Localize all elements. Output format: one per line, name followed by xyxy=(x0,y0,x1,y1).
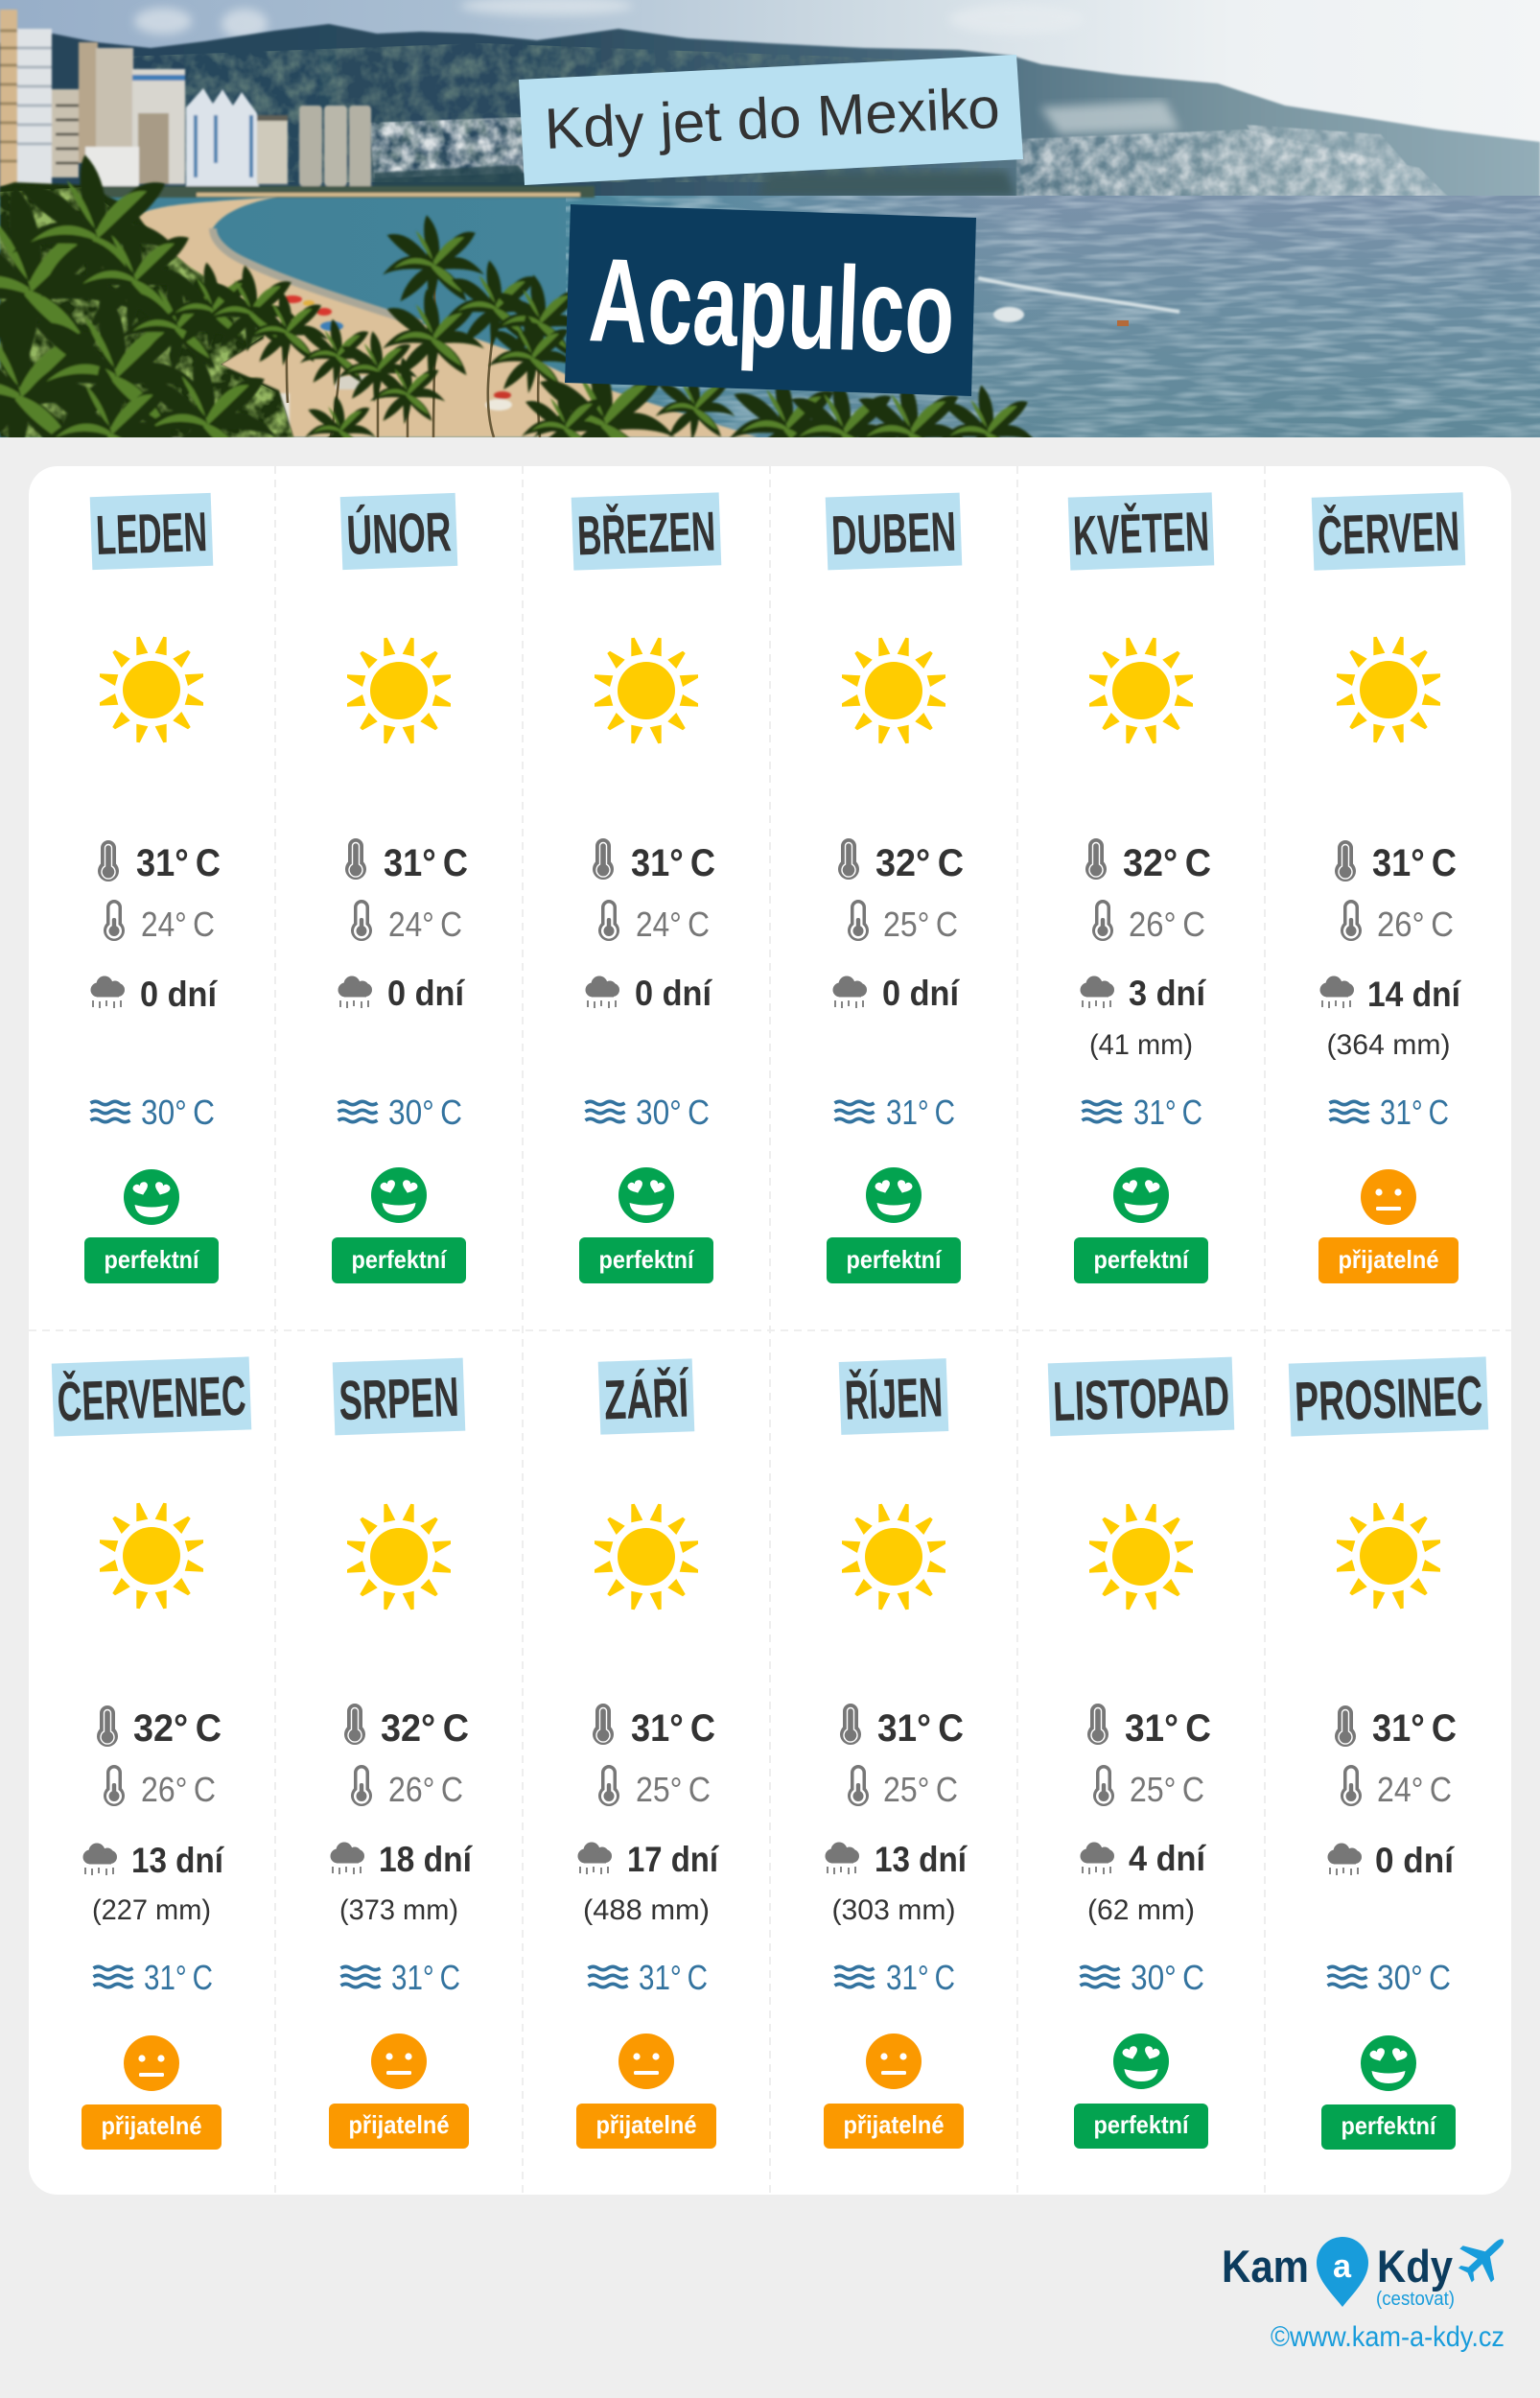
panel: months table xyxy=(29,466,1511,2195)
icon: sun xyxy=(595,1504,698,1610)
rating: perfektní: perfektní xyxy=(1093,1245,1189,1274)
palms xyxy=(0,182,293,437)
rain days: 13 dní xyxy=(131,1841,225,1880)
rain days xyxy=(585,974,713,1013)
rating: přijatelné xyxy=(576,2034,716,2149)
icon: sun xyxy=(347,638,451,743)
month label xyxy=(839,1358,948,1435)
max temperature: 32° C xyxy=(1123,842,1211,884)
month: září xyxy=(576,1358,720,2149)
rating: perfektní: perfektní xyxy=(846,1245,942,1274)
rain days: (373 mm) xyxy=(339,1894,458,1926)
min temperature: 26° C xyxy=(388,1770,463,1809)
rating: perfektní xyxy=(1074,1167,1208,1283)
max temperature xyxy=(1335,840,1457,884)
month label: BŘEZEN xyxy=(576,501,716,567)
sea temperature xyxy=(94,1958,213,1997)
rain days xyxy=(1327,1841,1456,1880)
rating: přijatelné xyxy=(824,2034,964,2149)
rain days: 4 dní xyxy=(1129,1839,1207,1878)
sea temperature: 31° C xyxy=(144,1958,213,1997)
month: květen xyxy=(1068,492,1214,1283)
rain days xyxy=(832,974,961,1013)
max temperature xyxy=(344,1704,469,1750)
rating: přijatelné: přijatelné xyxy=(349,2110,449,2139)
rain days: (227 mm) xyxy=(92,1894,211,1926)
icon: sun xyxy=(100,637,203,742)
rating: přijatelné: přijatelné xyxy=(1339,1245,1438,1274)
min temperature xyxy=(1341,1765,1452,1809)
rain days: (41 mm) xyxy=(1089,1029,1193,1061)
sea temperature: 30° C xyxy=(388,1093,462,1132)
month label xyxy=(52,1356,251,1437)
icon: sun xyxy=(1337,1503,1440,1609)
logo: Kam a Kdy: Kam xyxy=(1222,2241,1309,2292)
sea temperature: 30° C xyxy=(636,1093,710,1132)
month label: LISTOPAD xyxy=(1052,1365,1230,1433)
month: červen xyxy=(1312,492,1465,1283)
icon: sun xyxy=(842,638,945,743)
month: červenec xyxy=(52,1356,251,2150)
month label: ÚNOR xyxy=(345,501,453,567)
month label xyxy=(572,492,721,571)
month label xyxy=(340,493,457,570)
max temperature: 31° C xyxy=(1125,1707,1211,1750)
rating: perfektní xyxy=(579,1167,713,1283)
rating: přijatelné: přijatelné xyxy=(844,2110,944,2139)
min temperature: 26° C xyxy=(141,1770,216,1809)
icon: sun xyxy=(1089,638,1193,743)
sea temperature xyxy=(589,1958,708,1997)
month: prosinec xyxy=(1289,1356,1488,2150)
month: leden xyxy=(84,493,221,1283)
rain days: (488 mm) xyxy=(583,1894,710,1926)
max temperature xyxy=(840,1704,964,1750)
rating: přijatelné: přijatelné xyxy=(596,2110,696,2139)
banner: Kdy jet do Mexiko xyxy=(519,55,1023,185)
sea temperature: 31° C xyxy=(886,1093,955,1132)
min temperature: 25° C xyxy=(883,1770,958,1809)
month: srpen xyxy=(329,1358,474,2149)
max temperature xyxy=(345,838,468,884)
sea temperature: 31° C xyxy=(1380,1093,1449,1132)
min temperature xyxy=(351,900,462,944)
min temperature xyxy=(1092,900,1205,944)
min temperature xyxy=(848,1765,958,1809)
website credit: ©www.kam-a-kdy.cz xyxy=(1271,2321,1505,2353)
min temperature xyxy=(104,900,215,944)
rain days: 0 dní xyxy=(1375,1841,1456,1880)
buildings xyxy=(0,10,595,198)
min temperature xyxy=(598,900,710,944)
sea temperature: 30° C xyxy=(1377,1958,1451,1997)
sea temperature: 31° C xyxy=(391,1958,460,1997)
rain days: 0 dní xyxy=(635,974,713,1013)
month label: LEDEN xyxy=(95,501,208,567)
max temperature: 31° C xyxy=(1372,1707,1457,1750)
rain days xyxy=(825,1840,968,1926)
month label xyxy=(598,1358,694,1435)
min temperature: 26° C xyxy=(1377,905,1454,944)
month label xyxy=(1312,492,1465,571)
month label xyxy=(1048,1357,1234,1436)
min temperature: 24° C xyxy=(636,905,710,944)
rain days: 18 dní xyxy=(379,1840,474,1879)
rain days xyxy=(338,974,466,1013)
rating: perfektní: perfektní xyxy=(1341,2111,1436,2140)
min temperature: 25° C xyxy=(1130,1770,1204,1809)
rating: přijatelné: přijatelné xyxy=(102,2111,201,2140)
sea temperature xyxy=(90,1093,215,1132)
rating: přijatelné xyxy=(82,2035,222,2150)
min temperature: 26° C xyxy=(1129,905,1205,944)
logo: Kam a Kdy: a xyxy=(1333,2248,1352,2285)
month: duben xyxy=(826,493,964,1283)
min temperature: 25° C xyxy=(636,1770,711,1809)
month label: ZÁŘÍ xyxy=(603,1366,690,1432)
max temperature xyxy=(1335,1705,1457,1750)
rain days xyxy=(1080,974,1207,1061)
rating: perfektní: perfektní xyxy=(104,1245,199,1274)
min temperature xyxy=(848,900,958,944)
month label xyxy=(826,493,962,570)
min temperature xyxy=(351,1765,463,1809)
banner: Acapulco xyxy=(565,204,976,396)
rating: perfektní xyxy=(332,1167,466,1283)
logo: Kam a Kdy: (cestovat) xyxy=(1376,2289,1455,2310)
sea temperature xyxy=(338,1093,462,1132)
min temperature xyxy=(598,1765,711,1809)
max temperature: 31° C xyxy=(1372,842,1457,884)
max temperature: 31° C xyxy=(631,1707,715,1750)
logo: Kam a Kdy: Kdy xyxy=(1377,2241,1453,2292)
sea temperature xyxy=(834,1093,955,1132)
rain days: 0 dní xyxy=(387,974,466,1013)
beach xyxy=(134,197,758,437)
max temperature xyxy=(98,840,221,884)
max temperature: 32° C xyxy=(381,1707,469,1750)
rain days: (62 mm) xyxy=(1087,1894,1195,1926)
month label: KVĚTEN xyxy=(1072,501,1210,567)
rating: perfektní: perfektní xyxy=(1093,2110,1189,2139)
rain days xyxy=(90,975,219,1014)
rating: perfektní: perfektní xyxy=(351,1245,447,1274)
max temperature xyxy=(1087,1704,1211,1750)
rating: perfektní xyxy=(84,1169,219,1283)
banner: Acapulco: Acapulco xyxy=(587,234,957,379)
min temperature: 25° C xyxy=(883,905,958,944)
sea temperature xyxy=(1327,1958,1451,1997)
month: říjen xyxy=(824,1358,968,2149)
sea temperature xyxy=(1082,1093,1202,1132)
max temperature xyxy=(593,838,715,884)
banner: Kdy jet do Mexiko: Kdy jet do Mexiko xyxy=(543,76,1001,161)
sea temperature xyxy=(585,1093,710,1132)
rating: přijatelné xyxy=(329,2034,469,2149)
month label: ŘÍJEN xyxy=(844,1366,944,1432)
header photo: Acapulco bay xyxy=(0,0,1540,437)
min temperature xyxy=(104,1765,216,1809)
rain days xyxy=(577,1840,720,1926)
month: listopad xyxy=(1048,1357,1234,2149)
sea temperature xyxy=(1080,1958,1204,1997)
min temperature: 24° C xyxy=(141,905,215,944)
rating: perfektní: perfektní xyxy=(598,1245,694,1274)
sea temperature: 30° C xyxy=(141,1093,215,1132)
rain days xyxy=(1080,1839,1207,1926)
max temperature xyxy=(593,1704,715,1750)
rain days xyxy=(82,1841,225,1926)
month label xyxy=(1068,492,1214,571)
rain days: 17 dní xyxy=(627,1840,720,1879)
month: březen xyxy=(572,492,721,1283)
rain days: 0 dní xyxy=(882,974,961,1013)
sea temperature: 31° C xyxy=(639,1958,708,1997)
month label: ČERVENEC xyxy=(57,1365,247,1433)
min temperature: 24° C xyxy=(1377,1770,1452,1809)
rain days: 13 dní xyxy=(875,1840,968,1879)
icon: sun xyxy=(347,1504,451,1610)
max temperature: 31° C xyxy=(631,842,715,884)
rain days: 14 dní xyxy=(1367,975,1462,1014)
rain days xyxy=(1319,975,1462,1061)
month label: SRPEN xyxy=(338,1366,460,1432)
rain days: (303 mm) xyxy=(832,1894,955,1926)
icon: sun xyxy=(1337,637,1440,742)
max temperature xyxy=(97,1705,222,1750)
sea temperature: 31° C xyxy=(1133,1093,1202,1132)
sea temperature xyxy=(341,1958,460,1997)
max temperature: 32° C xyxy=(133,1707,222,1750)
max temperature: 32° C xyxy=(875,842,964,884)
month label xyxy=(333,1358,465,1435)
min temperature xyxy=(1093,1765,1204,1809)
icon: sun xyxy=(842,1504,945,1610)
rain days: 0 dní xyxy=(140,975,219,1014)
month: únor xyxy=(332,493,468,1283)
rating: perfektní xyxy=(1321,2035,1456,2150)
logo: Kam a Kdy xyxy=(1222,2222,1519,2310)
rating: perfektní xyxy=(1074,2034,1208,2149)
max temperature xyxy=(838,838,964,884)
month label xyxy=(90,493,213,570)
icon: sun xyxy=(1089,1504,1193,1610)
icon: sun xyxy=(100,1503,203,1609)
max temperature: 31° C xyxy=(384,842,468,884)
icon: sun xyxy=(595,638,698,743)
sea temperature xyxy=(1329,1093,1449,1132)
max temperature xyxy=(1085,838,1211,884)
min temperature xyxy=(1341,900,1454,944)
rain days: 3 dní xyxy=(1129,974,1207,1013)
month label: DUBEN xyxy=(830,501,957,567)
rating: přijatelné xyxy=(1318,1169,1458,1283)
sea temperature: 30° C xyxy=(1131,1958,1204,1997)
rain days: (364 mm) xyxy=(1327,1029,1450,1061)
sea temperature: 31° C xyxy=(886,1958,955,1997)
sea temperature xyxy=(834,1958,955,1997)
max temperature: 31° C xyxy=(136,842,221,884)
rating: perfektní xyxy=(827,1167,961,1283)
min temperature: 24° C xyxy=(388,905,462,944)
max temperature: 31° C xyxy=(877,1707,964,1750)
rain days xyxy=(330,1840,474,1926)
